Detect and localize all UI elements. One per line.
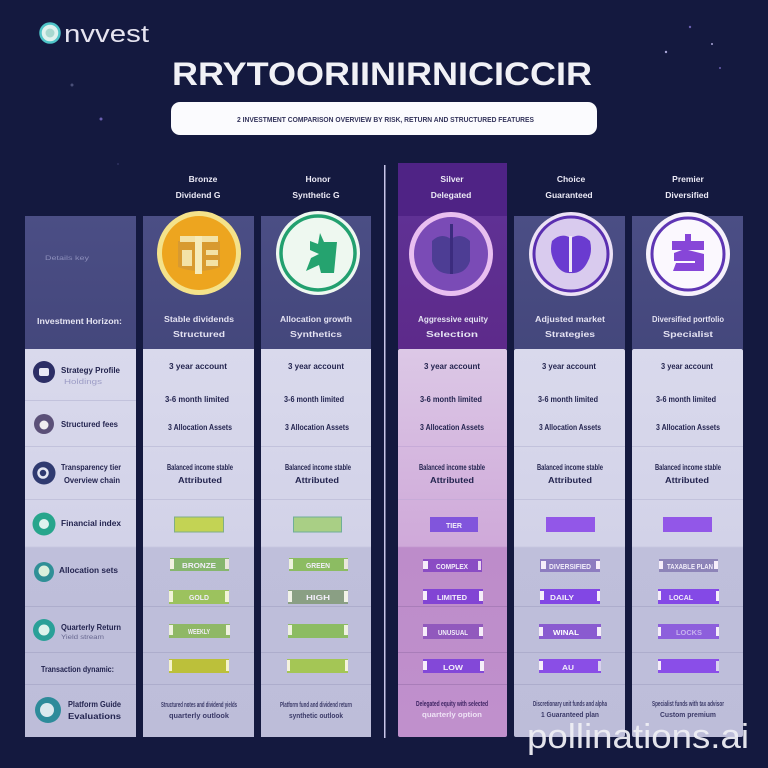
- pills: LOCKS: [676, 628, 702, 637]
- panel text: [280, 315, 352, 339]
- panel text: Allocation growth: [280, 315, 352, 324]
- values: 3 year account: [424, 362, 480, 371]
- column header: Dividend G: [176, 190, 221, 200]
- panel text: Synthetics: [290, 330, 343, 339]
- pills: [423, 559, 484, 673]
- column header: [176, 174, 221, 200]
- icon: row 1: [33, 361, 55, 383]
- label: row 2: Structured fees: [61, 420, 119, 429]
- values: Attributed: [665, 476, 709, 485]
- panel: column 3 purple highlight: [398, 163, 507, 737]
- panel text: Strategies: [545, 330, 596, 339]
- icon: white coin: [646, 212, 730, 296]
- icon: row 4: [32, 512, 56, 536]
- subtitle pill: 2 INVESTMENT COMPARISON OVERVIEW BY RISK, RETURN AND STRUCTURED FEATURES: [237, 115, 534, 124]
- label: row 6: [61, 623, 121, 641]
- title: RRYTOORIINIRNICICCIR: [172, 56, 592, 92]
- footer text: [416, 699, 488, 719]
- column header: Diversified: [665, 190, 709, 200]
- values: 3 year account: [288, 362, 344, 371]
- footer text: Custom premium: [660, 710, 716, 719]
- panel text: [652, 315, 724, 339]
- panel text: Stable dividends: [164, 315, 235, 324]
- background specks: [70, 26, 721, 165]
- panel text: Specialist: [663, 330, 713, 339]
- footer text: Discretionary unit funds and alpha: [533, 699, 607, 708]
- heading: row labels: Investment Horizon:: [37, 317, 122, 326]
- subtitle pill: [171, 102, 597, 135]
- label: row 1: Strategy Profile: [61, 366, 121, 375]
- icon: row 8: [35, 697, 61, 723]
- values: [419, 362, 485, 485]
- icon: green coin: [276, 211, 360, 295]
- label: row 8: Platform Guide: [68, 700, 122, 709]
- values: 3-6 month limited: [165, 395, 229, 404]
- values: 3-6 month limited: [420, 395, 482, 404]
- values: 3 Allocation Assets: [656, 423, 720, 432]
- pills: WINAL: [553, 628, 579, 637]
- pills: [539, 559, 601, 673]
- icon: row 6: [33, 619, 55, 641]
- footer text: [161, 700, 237, 720]
- values: 3 Allocation Assets: [539, 423, 601, 432]
- footer text: quarterly option: [422, 710, 482, 719]
- column header: Delegated: [431, 190, 471, 200]
- values: Attributed: [430, 476, 474, 485]
- pills: LIMITED: [437, 593, 468, 602]
- values: Balanced income stable: [419, 463, 485, 472]
- icon: row 5: [34, 562, 54, 582]
- values: [284, 362, 351, 485]
- icon: logo mark: [40, 24, 60, 42]
- label: row 1: Holdings: [64, 379, 103, 386]
- footer text: [533, 699, 607, 719]
- footer text: Specialist funds with tax advisor: [652, 699, 724, 708]
- pills: TAXABLE PLAN: [667, 562, 713, 571]
- bar: [663, 517, 712, 532]
- label: row 8: Evaluations: [68, 712, 122, 721]
- pills: DAILY: [550, 593, 574, 602]
- values: [655, 362, 721, 485]
- icon: purple coin: [409, 212, 493, 296]
- pills: DIVERSIFIED: [549, 562, 592, 571]
- values: 3 Allocation Assets: [285, 423, 349, 432]
- label: row 3: [61, 463, 121, 485]
- label: row 8: [68, 700, 122, 721]
- label: row 6: Yield stream: [61, 634, 104, 641]
- column header: Guaranteed: [545, 190, 593, 200]
- footer text: quarterly outlook: [169, 711, 230, 720]
- watermark: pollinations.ai: [527, 718, 749, 756]
- values: 3 Allocation Assets: [168, 423, 232, 432]
- values: Balanced income stable: [167, 463, 233, 472]
- pills: LOCAL: [669, 593, 693, 602]
- icon: row 2: [34, 414, 54, 434]
- panel: column 5 lilac: [632, 174, 743, 737]
- panel text: [164, 315, 235, 339]
- panel: column 1 gold: [143, 174, 254, 737]
- pills: [169, 558, 230, 673]
- values: Attributed: [295, 476, 339, 485]
- values: [165, 362, 233, 485]
- panel text: Adjusted market: [535, 315, 605, 324]
- pills: WEEKLY: [188, 627, 210, 636]
- panel: column 4 violet: [514, 174, 625, 737]
- panel text: [535, 315, 605, 339]
- column header: Bronze: [189, 174, 218, 184]
- column header: Synthetic G: [292, 190, 340, 200]
- label: row 7: Transaction dynamic:: [41, 665, 114, 674]
- values: Balanced income stable: [655, 463, 721, 472]
- values: Attributed: [178, 476, 222, 485]
- panel: row labels column: [25, 216, 136, 737]
- panel text: Diversified portfolio: [652, 315, 724, 324]
- logo: [40, 21, 149, 48]
- panel text: Structured: [173, 330, 225, 339]
- pills: AU: [562, 663, 574, 672]
- label: row 6: Quarterly Return: [61, 623, 121, 632]
- bar: [294, 517, 342, 532]
- bar: [174, 517, 224, 532]
- pills: LOW: [443, 663, 464, 672]
- icon: violet coin: [529, 212, 613, 296]
- values: 3-6 month limited: [284, 395, 344, 404]
- values: Balanced income stable: [285, 463, 351, 472]
- icon: gold coin: [157, 211, 241, 295]
- label: row 3: Transparency tier: [61, 463, 121, 472]
- bar: [430, 517, 478, 532]
- values: 3 year account: [169, 362, 227, 371]
- pills: [287, 558, 348, 673]
- column header: Premier: [672, 174, 705, 184]
- label: row 5: Allocation sets: [59, 566, 119, 575]
- values: 3-6 month limited: [656, 395, 716, 404]
- values: 3 Allocation Assets: [420, 423, 484, 432]
- column header: Honor: [305, 174, 331, 184]
- values: [537, 362, 603, 485]
- values: 3 year account: [542, 362, 596, 371]
- column header: [665, 174, 709, 200]
- small caption: Details key: [45, 256, 89, 262]
- pills: GOLD: [189, 593, 210, 602]
- column header: Silver: [440, 174, 464, 184]
- column header: [545, 174, 593, 200]
- footer text: [652, 699, 724, 719]
- footer text: Delegated equity with selected: [416, 699, 488, 708]
- values: Balanced income stable: [537, 463, 603, 472]
- logo wordmark: nvvest: [64, 21, 149, 48]
- pills: GREEN: [306, 561, 330, 570]
- panel text: [418, 315, 489, 339]
- pills: HIGH: [306, 593, 330, 602]
- bar: [546, 517, 595, 532]
- footer text: 1 Guaranteed plan: [541, 710, 599, 719]
- bar: TIER: [446, 521, 463, 530]
- column header: [431, 174, 471, 200]
- panel text: Selection: [426, 330, 478, 339]
- footer text: [280, 700, 352, 720]
- column divider: [384, 165, 386, 738]
- footer text: Platform fund and dividend return: [280, 700, 352, 709]
- values: Attributed: [548, 476, 592, 485]
- pills: BRONZE: [182, 561, 216, 570]
- column header: [292, 174, 340, 200]
- panel: column 2 green: [261, 174, 371, 737]
- pills: UNUSUAL: [438, 628, 468, 637]
- pills: [658, 559, 719, 673]
- values: 3 year account: [661, 362, 713, 371]
- label: row 1: [61, 366, 121, 386]
- footer text: Structured notes and dividend yields: [161, 700, 237, 709]
- icon: row 3: [32, 462, 56, 484]
- column header: Choice: [557, 174, 585, 184]
- panel text: Aggressive equity: [418, 315, 489, 324]
- footer text: synthetic outlook: [289, 711, 344, 720]
- label: row 4: Financial index: [61, 519, 122, 528]
- values: 3-6 month limited: [538, 395, 598, 404]
- label: row 3: Overview chain: [64, 476, 120, 485]
- pills: COMPLEX: [436, 562, 468, 571]
